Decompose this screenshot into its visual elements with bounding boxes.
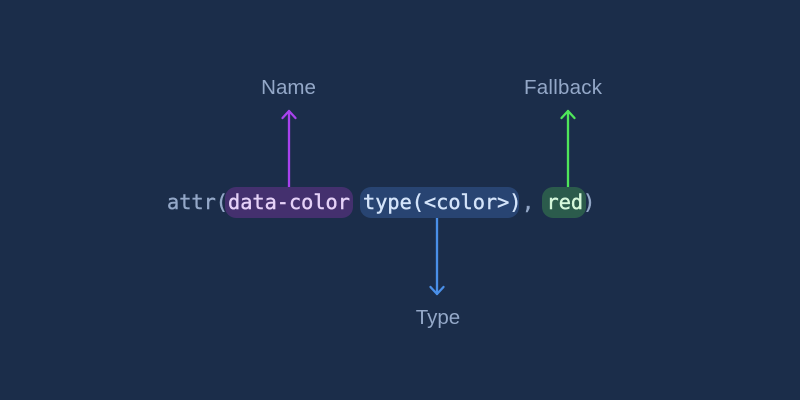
label: Type: Type xyxy=(416,306,460,329)
arrow: type xyxy=(430,218,444,294)
code: data-color: data-color xyxy=(228,190,350,214)
code: comma: , xyxy=(522,190,534,214)
highlight: data-color xyxy=(225,187,353,218)
code: closing paren: ) xyxy=(583,190,595,214)
code expression xyxy=(167,190,595,214)
code: attr(: attr( xyxy=(167,190,228,214)
code: red: red xyxy=(546,190,583,214)
label: Name: Name xyxy=(261,76,316,99)
highlight: type xyxy=(360,187,519,218)
highlight: red xyxy=(542,187,586,218)
arrow: name xyxy=(282,111,296,188)
label: Fallback: Fallback xyxy=(524,76,603,99)
arrow: fallback xyxy=(562,111,574,188)
code: type: type(<color>) xyxy=(363,190,522,214)
